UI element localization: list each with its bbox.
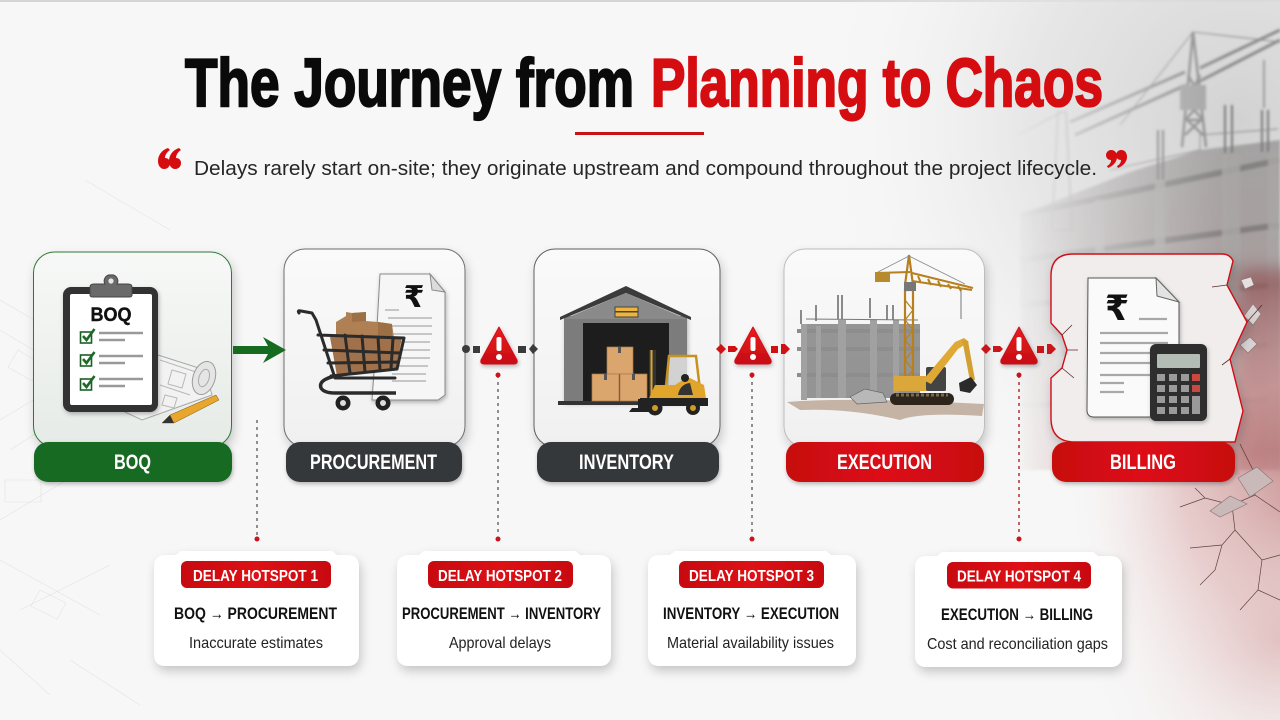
warning icon 2	[735, 327, 771, 364]
card	[154, 551, 359, 666]
label	[34, 442, 232, 482]
background: crane	[1055, 28, 1280, 194]
card	[34, 252, 232, 447]
background: construction site	[1008, 30, 1280, 475]
connector: inventory to execution	[716, 344, 790, 354]
title: Planning to Chaos	[651, 45, 1103, 121]
icon: ground	[787, 400, 984, 420]
description: Cost and reconciliation gaps	[927, 636, 1108, 653]
cracks	[1062, 285, 1262, 378]
warning icon 3	[1001, 327, 1037, 364]
label	[286, 442, 462, 482]
panel: delay hotspot 4	[915, 552, 1122, 667]
description: Inaccurate estimates	[189, 635, 323, 652]
badge: DELAY HOTSPOT 3	[689, 568, 814, 585]
badge	[428, 561, 573, 588]
panel: billing	[1051, 254, 1262, 482]
background: red wall behind billing	[1238, 270, 1280, 470]
closing quote mark	[1106, 150, 1127, 168]
label: EXECUTION	[837, 451, 932, 474]
icon: rupee document	[372, 274, 445, 400]
label: PROCUREMENT	[310, 451, 437, 474]
transition: EXECUTION → BILLING	[941, 606, 1093, 624]
warning icon 1	[481, 327, 517, 364]
background: red ground glow	[1040, 270, 1280, 720]
label	[1052, 442, 1235, 482]
background: building	[1020, 105, 1280, 475]
background: blueprint lines	[0, 180, 170, 705]
icon: concrete building	[797, 295, 920, 404]
icon: rupee document: ₹	[404, 281, 424, 314]
badge: DELAY HOTSPOT 4	[957, 568, 1081, 586]
card	[915, 552, 1122, 667]
transition: PROCUREMENT → INVENTORY	[402, 605, 601, 623]
card	[397, 551, 611, 666]
background: rubble	[1210, 277, 1273, 517]
connector: procurement to inventory	[462, 344, 538, 354]
icon: clipboard: BOQ	[90, 305, 132, 326]
background: pink ground	[1080, 450, 1280, 720]
icon: calculator	[1150, 344, 1207, 421]
icon: forklift	[629, 350, 708, 416]
transition: INVENTORY → EXECUTION	[663, 605, 839, 623]
badge: DELAY HOTSPOT 1	[193, 568, 318, 585]
panel: delay hotspot 1	[154, 551, 359, 666]
transition: BOQ → PROCUREMENT	[174, 605, 337, 623]
background: cracked ground	[1180, 444, 1280, 610]
icon: rupee invoice	[1087, 278, 1179, 417]
card	[534, 249, 720, 447]
badge	[679, 561, 824, 588]
description: Material availability issues	[667, 635, 834, 652]
panel: delay hotspot 3	[648, 551, 856, 666]
description: Approval delays	[449, 635, 551, 652]
label	[537, 442, 719, 482]
label: BILLING	[1110, 451, 1176, 474]
connector: execution to billing	[981, 344, 1056, 354]
title	[185, 45, 1103, 121]
badge	[181, 561, 331, 588]
panel: execution	[784, 249, 984, 482]
card	[784, 249, 984, 447]
label: INVENTORY	[579, 451, 674, 474]
panel: inventory	[534, 249, 720, 482]
card	[284, 249, 465, 447]
icon: excavator	[890, 338, 977, 405]
icon: shopping cart	[298, 311, 404, 410]
icon: warehouse	[558, 286, 691, 405]
label: BOQ	[114, 451, 151, 474]
panel: delay hotspot 2	[397, 551, 611, 666]
icon: rupee invoice: ₹	[1105, 289, 1129, 328]
title: The Journey from	[185, 45, 634, 121]
icon: clipboard	[63, 275, 158, 412]
opening quote mark	[158, 148, 181, 169]
badge: DELAY HOTSPOT 2	[438, 568, 562, 585]
icon: blueprint and pencil	[125, 355, 220, 423]
dotted leader lines	[254, 372, 1022, 542]
badge	[947, 562, 1091, 588]
quote text: Delays rarely start on-site; they originate upstream and compound throughout the project lifecycle.	[194, 158, 1097, 180]
panel: BOQ	[34, 252, 232, 482]
quote subtitle	[158, 148, 1127, 180]
icon: tower crane	[875, 255, 973, 385]
panel: procurement	[284, 249, 465, 482]
arrow: BOQ to procurement	[233, 337, 286, 363]
card	[648, 551, 856, 666]
label	[786, 442, 984, 482]
card	[1051, 254, 1247, 442]
title underline	[575, 132, 704, 135]
